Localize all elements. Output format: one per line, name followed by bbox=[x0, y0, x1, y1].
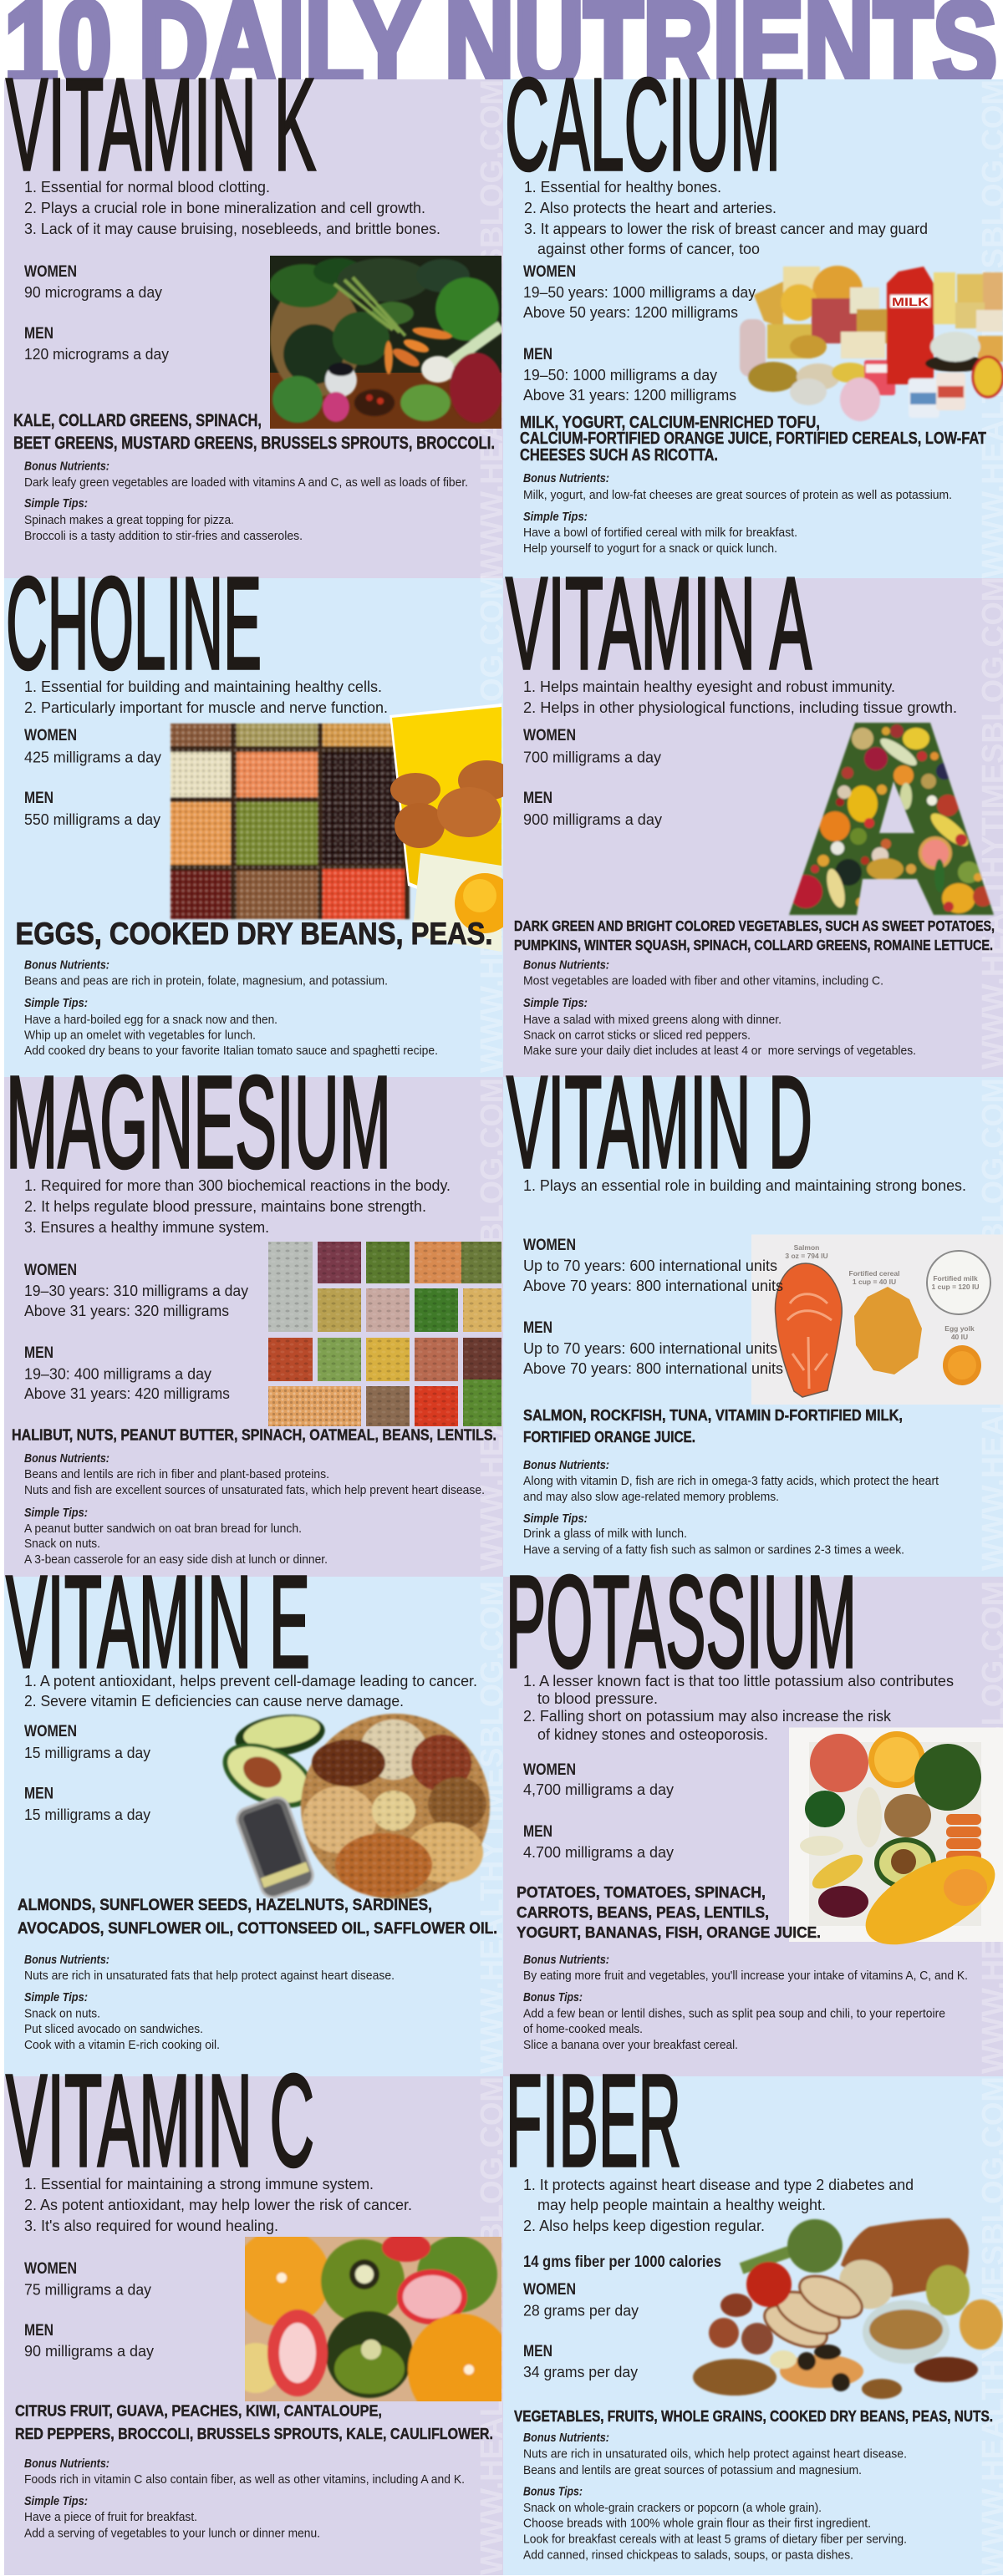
panel: fiber bbox=[503, 2048, 1003, 2575]
daily amounts bbox=[523, 727, 662, 828]
food sources: RED PEPPERS, BROCCOLI, BRUSSELS SPROUTS, KALE, CAULIFLOWER. bbox=[15, 2425, 493, 2442]
bonus nutrients: Nuts are rich in unsaturated oils, which help protect against heart disease. bbox=[523, 2448, 907, 2462]
image: egg yolk photo bbox=[412, 853, 515, 952]
bonus nutrients bbox=[24, 959, 388, 988]
bonus nutrients: Nuts and fish are excellent sources of unsaturated fats, which help prevent heart disease. bbox=[24, 1484, 485, 1497]
simple tips bbox=[24, 1991, 220, 2052]
daily amounts: Above 70 years: 800 international units bbox=[523, 1278, 783, 1294]
daily amounts: 34 grams per day bbox=[523, 2364, 638, 2380]
benefits list: 3. It's also required for wound healing. bbox=[24, 2218, 278, 2234]
simple tips: Have a piece of fruit for breakfast. bbox=[24, 2511, 197, 2524]
simple tips: Drink a glass of milk with lunch. bbox=[523, 1527, 687, 1541]
simple tips bbox=[24, 2495, 320, 2540]
daily amounts: 19–30: 400 milligrams a day bbox=[24, 1365, 211, 1382]
daily amounts bbox=[523, 263, 756, 404]
food sources: CITRUS FRUIT, GUAVA, PEACHES, KIWI, CANTALOUPE, bbox=[15, 2401, 382, 2420]
daily amounts: MEN bbox=[523, 790, 552, 807]
panel: vitamin E: VITAMIN E bbox=[6, 1549, 310, 1695]
panel: choline: WWW.HEALTHYTIMESBLOG.COM bbox=[475, 574, 510, 1073]
daily amounts: 425 milligrams a day bbox=[24, 749, 161, 765]
bonus nutrients: Bonus Nutrients: bbox=[523, 472, 609, 485]
food sources: CARROTS, BEANS, PEAS, LENTILS, bbox=[517, 1903, 769, 1921]
bonus nutrients bbox=[24, 460, 468, 490]
benefits list: 3. Lack of it may cause bruising, nosebleeds, and brittle bones. bbox=[24, 221, 440, 237]
bonus nutrients bbox=[523, 1459, 939, 1504]
image: plate of potassium foods bbox=[789, 1728, 1003, 1963]
benefits list: to blood pressure. bbox=[537, 1690, 658, 1707]
bonus nutrients: Foods rich in vitamin C also contain fiber, as well as other vitamins, including A and K. bbox=[24, 2473, 465, 2487]
benefits list: against other forms of cancer, too bbox=[537, 241, 760, 257]
image: leafy greens and vegetables bbox=[269, 256, 503, 429]
simple tips: Snack on nuts. bbox=[24, 2008, 100, 2021]
panel: vitamin E bbox=[4, 1549, 510, 2076]
daily amounts: MEN bbox=[24, 2322, 53, 2340]
panel: vitamin D bbox=[503, 1049, 1003, 1577]
bonus nutrients: Bonus Nutrients: bbox=[523, 1459, 609, 1472]
daily amounts: Above 31 years: 1200 milligrams bbox=[523, 387, 736, 404]
panel: vitamin C: VITAMIN C bbox=[6, 2048, 314, 2194]
food sources: KALE, COLLARD GREENS, SPINACH, bbox=[13, 411, 262, 430]
image: legume grid bbox=[171, 724, 410, 919]
bonus tips: Snack on whole-grain crackers or popcorn (a whole grain). bbox=[523, 2502, 822, 2515]
image: eggs on yellow photo bbox=[389, 704, 515, 919]
daily amounts: WOMEN bbox=[24, 1723, 77, 1740]
photo captions: Salmon bbox=[794, 1243, 819, 1252]
panel: vitamin C: WWW.HEALTHYTIMESBLOG.COM bbox=[475, 2076, 510, 2575]
simple tips: Simple Tips: bbox=[523, 1512, 588, 1526]
food sources: YOGURT, BANANAS, FISH, ORANGE JUICE. bbox=[517, 1923, 821, 1941]
food sources: FORTIFIED ORANGE JUICE. bbox=[523, 1428, 695, 1446]
simple tips: Simple Tips: bbox=[24, 997, 88, 1010]
food sources bbox=[13, 411, 495, 453]
panel: vitamin E: WWW.HEALTHYTIMESBLOG.COM bbox=[475, 1581, 510, 2074]
daily amounts: MEN bbox=[523, 1823, 552, 1841]
food sources: EGGS, COOKED DRY BEANS, PEAS. bbox=[15, 917, 493, 951]
benefits list: 3. It appears to lower the risk of breast cancer and may guard bbox=[524, 221, 928, 237]
benefits list: 1. It protects against heart disease and type 2 diabetes and bbox=[523, 2177, 914, 2193]
daily amounts: WOMEN bbox=[523, 2281, 576, 2299]
photo captions: Fortified milk bbox=[933, 1274, 978, 1283]
simple tips: Cook with a vitamin E-rich cooking oil. bbox=[24, 2039, 220, 2052]
daily amounts: Above 31 years: 420 milligrams bbox=[24, 1385, 230, 1402]
food sources: AVOCADOS, SUNFLOWER OIL, COTTONSEED OIL, SAFFLOWER OIL. bbox=[18, 1919, 497, 1938]
benefits list: 1. A potent antioxidant, helps prevent cell-damage leading to cancer. bbox=[24, 1673, 477, 1689]
benefits list: 2. Also helps keep digestion regular. bbox=[523, 2218, 765, 2234]
benefits list: 1. Essential for maintaining a strong immune system. bbox=[24, 2176, 374, 2192]
simple tips: Make sure your daily diet includes at least 4 or more servings of vegetables. bbox=[523, 1044, 916, 1058]
daily amounts: WOMEN bbox=[523, 263, 576, 281]
daily amounts: Up to 70 years: 600 international units bbox=[523, 1340, 777, 1357]
milk carton label: MILK bbox=[892, 295, 929, 308]
simple tips: Spinach makes a great topping for pizza. bbox=[24, 514, 234, 527]
photo captions: Fortified cereal bbox=[849, 1269, 899, 1278]
image: dairy products bbox=[740, 266, 1003, 421]
daily amounts: 19–30 years: 310 milligrams a day bbox=[24, 1283, 248, 1299]
bonus tips: of home-cooked meals. bbox=[523, 2023, 643, 2036]
food sources bbox=[18, 1896, 497, 1938]
image: food tile grid bbox=[268, 1242, 502, 1426]
bonus tips: Add canned, rinsed chickpeas to salads, soups, or pasta dishes. bbox=[523, 2549, 853, 2563]
daily amounts bbox=[523, 1761, 674, 1861]
food sources: CHEESES SUCH AS RICOTTA. bbox=[520, 446, 718, 465]
daily amounts: 550 milligrams a day bbox=[24, 811, 160, 828]
simple tips: Have a serving of a fatty fish such as salmon or sardines 2-3 times a week. bbox=[523, 1544, 904, 1557]
panel: vitamin K bbox=[4, 52, 510, 578]
food sources bbox=[523, 1406, 903, 1446]
photo captions: 1 cup = 40 IU bbox=[853, 1278, 896, 1286]
benefits list: 2. It helps regulate blood pressure, maintains bone strength. bbox=[24, 1198, 426, 1215]
daily amounts: MEN bbox=[24, 1344, 53, 1362]
simple tips: Add cooked dry beans to your favorite Italian tomato sauce and spaghetti recipe. bbox=[24, 1044, 438, 1058]
benefits list: 2. As potent antioxidant, may help lower the risk of cancer. bbox=[24, 2197, 412, 2213]
benefits list bbox=[523, 678, 957, 716]
daily amounts: Above 31 years: 320 milligrams bbox=[24, 1303, 229, 1319]
daily amounts bbox=[24, 727, 161, 828]
benefits list: 1. Plays an essential role in building and maintaining strong bones. bbox=[523, 1177, 966, 1194]
daily amounts: 15 milligrams a day bbox=[24, 1806, 150, 1823]
benefits list: 2. Falling short on potassium may also increase the risk bbox=[523, 1708, 892, 1725]
bonus nutrients: Beans and lentils are great sources of potassium and magnesium. bbox=[523, 2464, 862, 2477]
bonus nutrients: Bonus Nutrients: bbox=[523, 959, 609, 973]
panel: potassium bbox=[503, 1549, 1003, 2076]
simple tips bbox=[24, 497, 303, 543]
simple tips: Simple Tips: bbox=[24, 2495, 88, 2508]
simple tips: Simple Tips: bbox=[24, 497, 88, 511]
daily amounts: MEN bbox=[24, 325, 53, 343]
simple tips: Add a serving of vegetables to your lunch or dinner menu. bbox=[24, 2527, 320, 2540]
food sources: HALIBUT, NUTS, PEANUT BUTTER, SPINACH, OATMEAL, BEANS, LENTILS. bbox=[12, 1426, 496, 1444]
bonus nutrients: Bonus Nutrients: bbox=[24, 1954, 109, 1967]
bonus tips bbox=[523, 2485, 907, 2563]
panel: vitamin K: WWW.HEALTHYTIMESBLOG.COM bbox=[475, 79, 510, 578]
bonus nutrients: Bonus Nutrients: bbox=[24, 1452, 109, 1466]
bonus nutrients: Bonus Nutrients: bbox=[523, 2431, 609, 2445]
benefits list: 3. Ensures a healthy immune system. bbox=[24, 1219, 269, 1236]
simple tips: Simple Tips: bbox=[523, 511, 588, 524]
bonus tips: Choose breads with 100% whole grain flour as their first ingredient. bbox=[523, 2518, 871, 2531]
bonus nutrients: Bonus Nutrients: bbox=[24, 460, 109, 473]
food sources: ALMONDS, SUNFLOWER SEEDS, HAZELNUTS, SARDINES, bbox=[18, 1896, 432, 1914]
image: avocado, sardines and nuts bbox=[212, 1710, 490, 1901]
daily amounts bbox=[523, 2253, 721, 2380]
daily amounts: 4.700 milligrams a day bbox=[523, 1844, 674, 1861]
bonus nutrients: and may also slow age-related memory problems. bbox=[523, 1491, 779, 1504]
benefits list bbox=[523, 1673, 954, 1743]
image: letter A made of fruit and vegetables bbox=[789, 723, 994, 915]
bonus nutrients bbox=[523, 1954, 968, 1983]
simple tips: Simple Tips: bbox=[24, 1506, 88, 1520]
bonus nutrients: By eating more fruit and vegetables, you'll increase your intake of vitamins A, C, and K. bbox=[523, 1969, 968, 1983]
daily amounts: MEN bbox=[24, 790, 53, 807]
bonus nutrients bbox=[24, 1954, 395, 1983]
daily amounts: 19–50: 1000 milligrams a day bbox=[523, 367, 717, 384]
bonus nutrients: Milk, yogurt, and low-fat cheeses are great sources of protein as well as potassium. bbox=[523, 489, 952, 502]
daily amounts bbox=[24, 263, 169, 363]
photo captions: 1 cup = 120 IU bbox=[932, 1283, 979, 1291]
daily amounts: MEN bbox=[523, 2343, 552, 2360]
benefits list: 1. Essential for healthy bones. bbox=[524, 179, 721, 196]
benefits list bbox=[24, 1177, 451, 1236]
benefits list: 1. Helps maintain healthy eyesight and robust immunity. bbox=[523, 678, 895, 695]
benefits list: 2. Helps in other physiological functions, including tissue growth. bbox=[523, 699, 957, 716]
bonus nutrients: Nuts are rich in unsaturated fats that help protect against heart disease. bbox=[24, 1969, 395, 1983]
bonus nutrients: Along with vitamin D, fish are rich in omega-3 fatty acids, which protect the heart bbox=[523, 1475, 939, 1488]
bonus nutrients: Most vegetables are loaded with fiber and other vitamins, including C. bbox=[523, 975, 883, 988]
bonus nutrients: Bonus Nutrients: bbox=[24, 2457, 109, 2471]
daily amounts bbox=[523, 1237, 783, 1377]
daily amounts: WOMEN bbox=[24, 1262, 77, 1279]
daily amounts: WOMEN bbox=[24, 263, 77, 281]
panel: vitamin K: VITAMIN K bbox=[6, 52, 316, 198]
panel: calcium bbox=[503, 52, 1003, 578]
panel: fiber: FIBER bbox=[506, 2048, 681, 2194]
bonus nutrients: Bonus Nutrients: bbox=[523, 1954, 609, 1967]
daily amounts: 900 milligrams a day bbox=[523, 811, 662, 828]
photo captions: 40 IU bbox=[951, 1333, 968, 1341]
simple tips: Whip up an omelet with vegetables for lunch. bbox=[24, 1029, 256, 1043]
simple tips bbox=[523, 1512, 904, 1557]
photo captions: Egg yolk bbox=[944, 1324, 975, 1333]
benefits list bbox=[24, 678, 388, 716]
daily amounts: 4,700 milligrams a day bbox=[523, 1781, 674, 1798]
daily amounts: 28 grams per day bbox=[523, 2303, 639, 2319]
daily amounts: 75 milligrams a day bbox=[24, 2281, 151, 2298]
bonus nutrients: Bonus Nutrients: bbox=[24, 959, 109, 973]
bonus tips: Bonus Tips: bbox=[523, 1991, 583, 2004]
simple tips: Snack on carrot sticks or sliced red peppers. bbox=[523, 1029, 751, 1043]
benefits list: may help people maintain a healthy weight. bbox=[537, 2197, 826, 2213]
daily amounts: MEN bbox=[523, 1319, 552, 1337]
bonus nutrients: Dark leafy green vegetables are loaded with vitamins A and C, as well as loads of fiber. bbox=[24, 476, 468, 490]
daily amounts: Above 70 years: 800 international units bbox=[523, 1360, 783, 1377]
daily amounts: Up to 70 years: 600 international units bbox=[523, 1258, 777, 1274]
simple tips: Have a salad with mixed greens along with dinner. bbox=[523, 1014, 782, 1027]
benefits list bbox=[24, 179, 440, 237]
bonus nutrients bbox=[523, 472, 952, 502]
simple tips: Broccoli is a tasty addition to stir-fries and casseroles. bbox=[24, 530, 303, 543]
bonus tips: Bonus Tips: bbox=[523, 2485, 583, 2498]
daily amounts: MEN bbox=[523, 346, 552, 363]
bonus nutrients bbox=[24, 1452, 485, 1497]
benefits list: 1. A lesser known fact is that too little potassium also contributes bbox=[523, 1673, 954, 1689]
daily amounts: 700 milligrams a day bbox=[523, 749, 661, 765]
food sources: SALMON, ROCKFISH, TUNA, VITAMIN D-FORTIFIED MILK, bbox=[523, 1406, 903, 1424]
bonus nutrients: Beans and peas are rich in protein, folate, magnesium, and potassium. bbox=[24, 975, 388, 988]
photo captions bbox=[785, 1243, 979, 1341]
benefits list bbox=[24, 2176, 412, 2234]
panel: choline: CHOLINE bbox=[6, 551, 262, 697]
image: sliced citrus, kiwi and strawberries bbox=[245, 2237, 502, 2401]
daily amounts: 14 gms fiber per 1000 calories bbox=[523, 2253, 721, 2271]
simple tips: Put sliced avocado on sandwiches. bbox=[24, 2023, 203, 2036]
bonus tips: Slice a banana over your breakfast cereal. bbox=[523, 2039, 738, 2052]
daily amounts: 90 milligrams a day bbox=[24, 2343, 154, 2360]
daily amounts: 120 micrograms a day bbox=[24, 346, 169, 363]
bonus nutrients: Beans and lentils are rich in fiber and plant-based proteins. bbox=[24, 1468, 329, 1481]
daily amounts bbox=[24, 1723, 150, 1823]
daily amounts: MEN bbox=[24, 1785, 53, 1803]
daily amounts bbox=[24, 2260, 154, 2360]
daily amounts: 90 micrograms a day bbox=[24, 284, 162, 301]
simple tips: Simple Tips: bbox=[24, 1991, 88, 2004]
panel: magnesium: WWW.HEALTHYTIMESBLOG.COM bbox=[475, 1078, 510, 1571]
bonus tips bbox=[523, 1991, 945, 2052]
image: vitamin D foods bbox=[751, 1235, 1003, 1405]
benefits list: 1. Essential for building and maintaining healthy cells. bbox=[24, 678, 382, 695]
benefits list: 1. Essential for normal blood clotting. bbox=[24, 179, 270, 196]
food sources: POTATOES, TOMATOES, SPINACH, bbox=[517, 1883, 766, 1901]
food sources: MILK, YOGURT, CALCIUM-ENRICHED TOFU, bbox=[520, 414, 820, 432]
daily amounts bbox=[24, 1262, 248, 1402]
daily amounts: WOMEN bbox=[24, 2260, 77, 2278]
bonus tips: Add a few bean or lentil dishes, such as split pea soup and chili, to your repertoire bbox=[523, 2008, 945, 2021]
simple tips: Have a bowl of fortified cereal with milk for breakfast. bbox=[523, 526, 797, 540]
daily amounts: Above 50 years: 1200 milligrams bbox=[523, 304, 738, 321]
simple tips bbox=[24, 997, 438, 1058]
food sources bbox=[514, 917, 995, 953]
simple tips bbox=[523, 511, 797, 556]
benefits list: 2. Particularly important for muscle and nerve function. bbox=[24, 699, 388, 716]
daily amounts: WOMEN bbox=[523, 1761, 576, 1779]
benefits list: of kidney stones and osteoporosis. bbox=[537, 1726, 768, 1743]
image: fiber rich foods bbox=[693, 2218, 1003, 2399]
food sources bbox=[520, 414, 986, 465]
simple tips: Simple Tips: bbox=[523, 997, 588, 1010]
benefits list: 2. Plays a crucial role in bone mineralization and cell growth. bbox=[24, 200, 425, 216]
food sources bbox=[517, 1883, 821, 1941]
benefits list: 1. Required for more than 300 biochemical reactions in the body. bbox=[24, 1177, 451, 1194]
simple tips: Help yourself to yogurt for a snack or quick lunch. bbox=[523, 542, 777, 556]
daily amounts: WOMEN bbox=[24, 727, 77, 744]
bonus nutrients bbox=[523, 959, 883, 988]
benefits list bbox=[523, 2177, 914, 2234]
benefits list bbox=[24, 1673, 477, 1710]
panel: vitamin C bbox=[4, 2048, 513, 2575]
panel: magnesium bbox=[4, 1049, 510, 1577]
photo captions: 3 oz = 794 IU bbox=[785, 1252, 828, 1260]
daily amounts: WOMEN bbox=[523, 727, 576, 744]
daily amounts: 19–50 years: 1000 milligrams a day bbox=[523, 284, 756, 301]
panel: magnesium: MAGNESIUM bbox=[6, 1049, 391, 1196]
bonus nutrients bbox=[24, 2457, 465, 2487]
panel: vitamin A bbox=[503, 551, 1003, 1077]
benefits list: 2. Severe vitamin E deficiencies can cause nerve damage. bbox=[24, 1693, 404, 1710]
bonus tips: Look for breakfast cereals with at least 5 grams of dietary fiber per serving. bbox=[523, 2533, 907, 2546]
food sources bbox=[15, 2401, 493, 2442]
simple tips: Snack on nuts. bbox=[24, 1537, 100, 1551]
simple tips: Have a hard-boiled egg for a snack now and then. bbox=[24, 1014, 277, 1027]
simple tips: A 3-bean casserole for an easy side dish at lunch or dinner. bbox=[24, 1553, 328, 1567]
simple tips bbox=[24, 1506, 328, 1567]
daily amounts: WOMEN bbox=[523, 1237, 576, 1254]
panel: choline bbox=[4, 551, 515, 1077]
simple tips: A peanut butter sandwich on oat bran bread for lunch. bbox=[24, 1522, 302, 1536]
food sources: BEET GREENS, MUSTARD GREENS, BRUSSELS SPROUTS, BROCCOLI. bbox=[13, 434, 495, 453]
simple tips bbox=[523, 997, 916, 1058]
benefits list: 2. Also protects the heart and arteries. bbox=[524, 200, 776, 216]
bonus nutrients bbox=[523, 2431, 907, 2477]
benefits list bbox=[524, 179, 928, 257]
daily amounts: 15 milligrams a day bbox=[24, 1745, 150, 1761]
